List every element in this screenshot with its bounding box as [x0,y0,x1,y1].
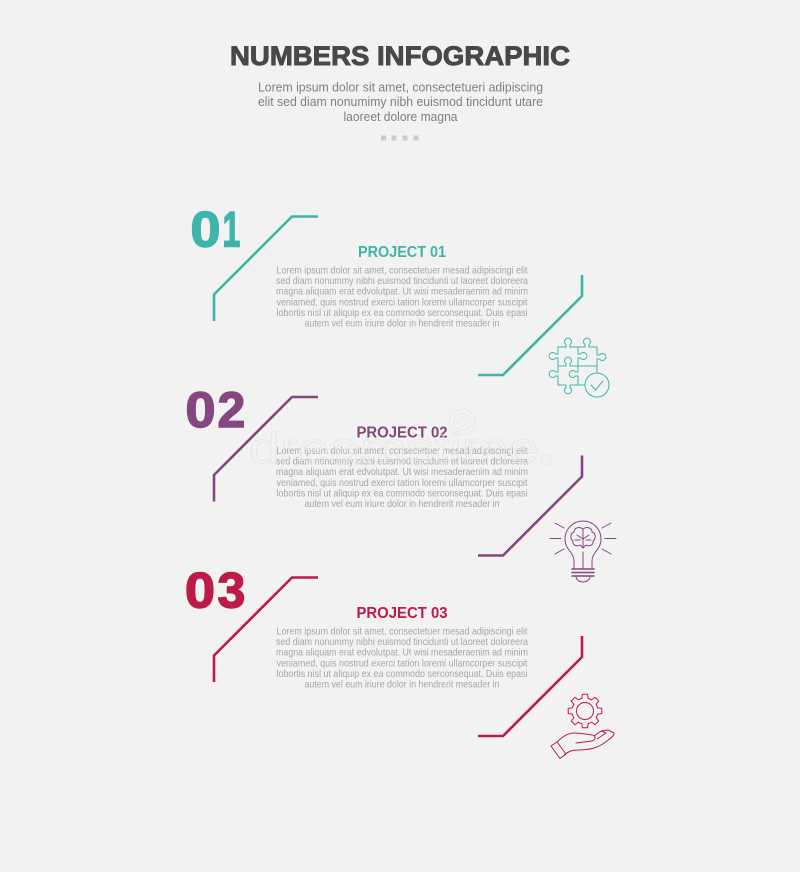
bottom-right bracket line [478,275,582,375]
title: NUMBERS INFOGRAPHIC [230,41,570,71]
subtitle text block: Lorem ipsum dolor sit amet, consectetueri adipiscing [258,80,543,94]
top-left bracket line [214,578,318,682]
body text: veniamed, quis nostrud exerci tation loremi ullamcorper suscipit [276,658,528,669]
body text: Lorem ipsum dolor sit amet, consectetuer mesad adipiscingi elit [276,626,528,638]
body text: autem vel eum iriure dolor in hendrerit mesader in [304,318,500,330]
body text: veniamed, quis nostrud exerci tation loremi ullamcorper suscipit [276,478,528,489]
number 01: 1 [222,201,240,257]
watermark: dreamstime [249,424,539,473]
number 03 [185,562,245,619]
body text [276,266,528,330]
icon: gear over open hand [551,694,614,758]
body text: lobortis nisl ut aliquip ex ea commodo serconsequat. Duis epasi [276,669,528,680]
number 02: 0 [186,383,216,439]
top-left bracket line [214,397,318,502]
body text: lobortis nisl ut aliquip ex ea commodo serconsequat. Duis epasi [276,308,528,319]
number 01: 0 [190,202,221,258]
body text: autem vel eum iriure dolor in hendrerit mesader in [304,499,500,510]
icon: puzzle with check mark [549,338,609,397]
icon: light bulb with brain [550,521,616,582]
panel: project 02 [186,382,616,582]
subtitle text block [258,80,543,124]
body text: magna aliquam erat edvolutpat. Ut wisi mesaderaenim ad minim [276,467,528,478]
number 03: 3 [218,562,245,618]
body text: lobortis nisl ut aliquip ex ea commodo serconsequat. Duis epasi [276,488,528,500]
top-left bracket line [214,216,318,321]
number 03: 0 [185,563,215,619]
body text [276,626,528,690]
decorative dots under subtitle [381,136,418,140]
subtitle text block: elit sed diam nonumimy nibh euismod tincidunt utare [258,95,543,109]
number 01 [190,201,240,258]
number 02 [186,382,245,439]
panel: project 01 [190,201,609,397]
heading: PROJECT 02 [356,424,448,442]
body text: sed diam nonummy nibhi euismod tincidunti ut laoreet doloreera [276,276,528,287]
body text: veniamed, quis nostrud exerci tation loremi ullamcorper suscipit [276,297,528,308]
body text [276,446,528,510]
body text: magna aliquam erat edvolutpat. Ut wisi mesaderaenim ad minim [276,287,528,298]
panel: project 03 [185,562,614,758]
body text: Lorem ipsum dolor sit amet, consectetuer mesad adipiscingi elit [276,446,528,457]
body text: magna aliquam erat edvolutpat. Ut wisi mesaderaenim ad minim [276,648,528,659]
bottom-right bracket line [478,456,582,556]
subtitle text block: laoreet dolore magna [344,110,458,124]
heading: PROJECT 01 [358,244,446,261]
body text: sed diam nonummy nibhi euismod tincidunti ut laoreet doloreera [276,637,528,648]
body text: autem vel eum iriure dolor in hendrerit mesader in [304,680,500,690]
body text: sed diam nonummy nibhi euismod tincidunti ut laoreet doloreera [276,456,528,468]
watermark [249,409,551,473]
body text: Lorem ipsum dolor sit amet, consectetuer mesad adipiscingi elit [276,266,528,276]
bottom-right bracket line [478,636,582,736]
heading: PROJECT 03 [356,605,448,622]
number 02: 2 [218,382,245,438]
